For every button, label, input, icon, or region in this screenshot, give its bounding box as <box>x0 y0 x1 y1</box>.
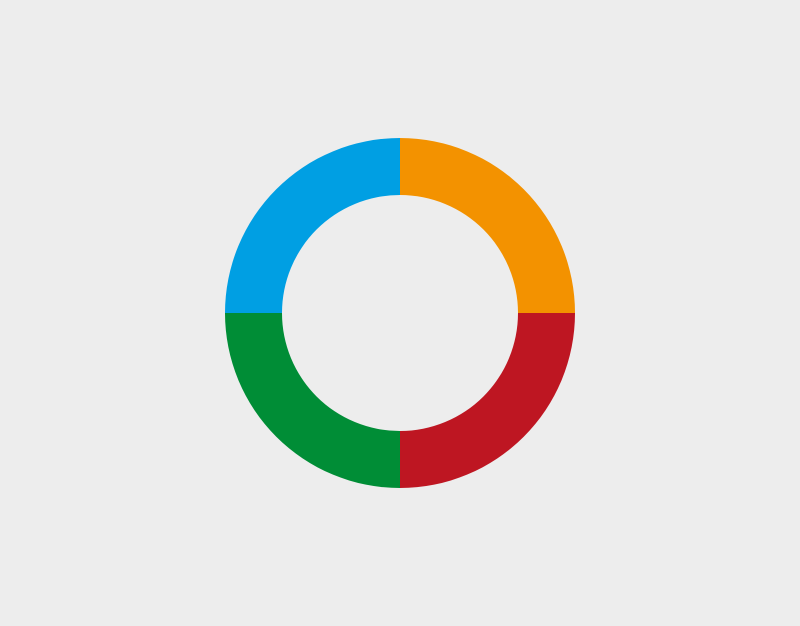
segment: orange top-right <box>400 138 575 313</box>
segment: green bottom-left <box>225 313 400 488</box>
segment: red bottom-right <box>400 313 575 488</box>
donut ring <box>225 138 575 488</box>
segment: blue top-left <box>225 138 400 313</box>
